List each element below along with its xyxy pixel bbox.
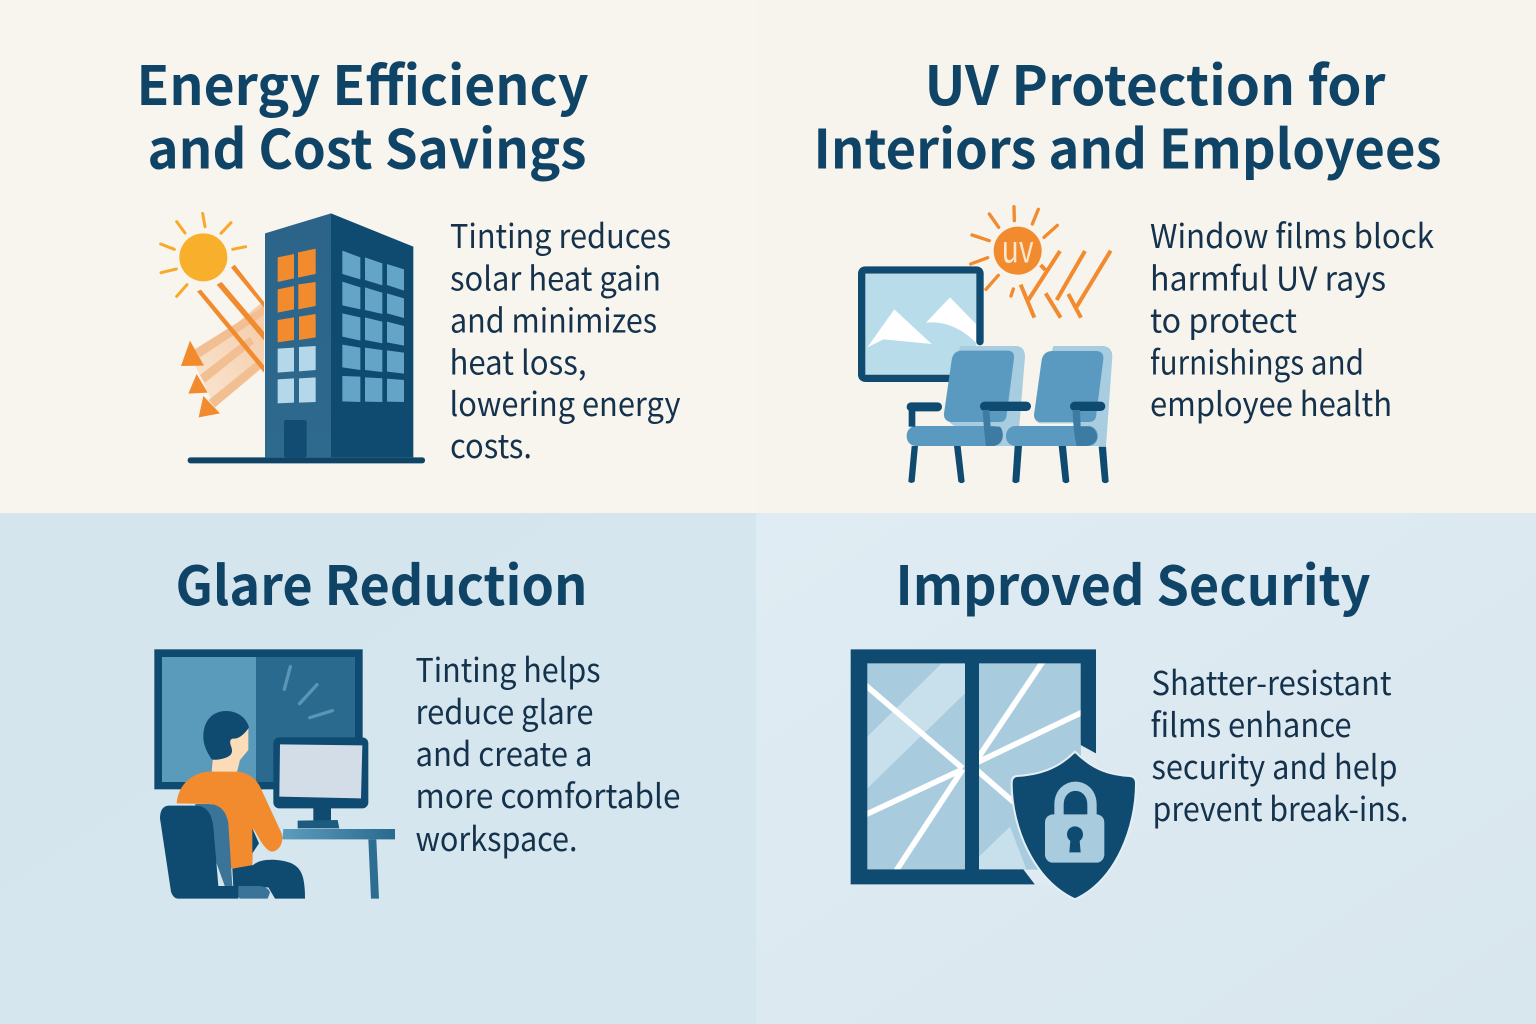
icon: sun rays xyxy=(197,265,264,373)
icon: cracked window and shield xyxy=(851,649,1136,899)
text: energy efficiency description: and minimizes xyxy=(450,294,657,342)
icon: uv sun xyxy=(971,207,1057,296)
text: glare reduction description: Tinting helps xyxy=(416,644,600,692)
icon: office chair xyxy=(160,804,270,899)
heading: uv protection xyxy=(814,42,1442,184)
heading: energy efficiency xyxy=(136,42,588,184)
text: energy efficiency description: lowering energy xyxy=(450,378,680,426)
text: glare reduction description: more comfortable xyxy=(416,770,680,818)
icon: person xyxy=(177,711,305,899)
heading: energy efficiency: and Cost Savings xyxy=(148,106,586,184)
heading: improved security: Improved Security xyxy=(896,542,1370,621)
text: glare reduction description: and create a xyxy=(416,728,592,776)
text: improved security description: prevent break-ins. xyxy=(1152,783,1408,831)
text: uv protection description: harmful UV rays xyxy=(1150,252,1386,300)
text: uv protection description: Window films block xyxy=(1150,210,1434,258)
text: improved security description: films enhance xyxy=(1150,699,1352,747)
icon: tinted window xyxy=(154,649,363,789)
icon: sun and building xyxy=(161,213,425,463)
text: energy efficiency description: Tinting reduces xyxy=(450,210,671,258)
text: uv protection description: to protect xyxy=(1150,294,1297,342)
panel: uv protection xyxy=(756,0,1536,513)
text: energy efficiency description xyxy=(450,210,680,468)
icon: cracked window xyxy=(851,649,1098,885)
icon: uv sun, picture window and chairs xyxy=(862,207,1112,483)
text: energy efficiency description: costs. xyxy=(450,420,532,468)
icon: framed window view xyxy=(862,270,980,378)
icon: building xyxy=(188,213,425,463)
text: glare reduction description: reduce glare xyxy=(416,686,594,734)
text: uv protection description: furnishings and xyxy=(1150,336,1364,384)
icon: security shield with lock xyxy=(1012,752,1136,899)
icon: sun xyxy=(161,213,246,296)
text: improved security description: Shatter-resistant xyxy=(1152,657,1392,705)
heading: energy efficiency: Energy Efficiency xyxy=(136,42,588,121)
text: uv protection description: employee health xyxy=(1150,378,1392,426)
icon: left chair xyxy=(907,346,1031,483)
panel: improved security xyxy=(756,513,1536,1024)
text: improved security description: security and help xyxy=(1152,741,1398,789)
text: uv protection description xyxy=(1150,210,1434,426)
icon: person at computer by window xyxy=(154,649,395,899)
icon: reflected heat bands xyxy=(181,301,264,417)
icon: right chair xyxy=(1006,346,1112,483)
panel: glare reduction xyxy=(0,513,756,1024)
text: glare reduction description xyxy=(416,644,680,861)
icon: uv sun: uv xyxy=(1002,220,1034,274)
heading: uv protection: Interiors and Employees xyxy=(814,106,1442,184)
icon: computer monitor xyxy=(273,737,368,828)
text: energy efficiency description: solar heat gain xyxy=(450,252,661,300)
heading: uv protection: UV Protection for xyxy=(924,42,1386,121)
icon: uv rays xyxy=(1021,251,1111,318)
text: improved security description xyxy=(1150,657,1408,831)
heading: glare reduction: Glare Reduction xyxy=(176,542,588,621)
text: energy efficiency description: heat loss, xyxy=(450,336,586,384)
panel: energy efficiency xyxy=(0,0,756,513)
text: glare reduction description: workspace. xyxy=(416,813,578,861)
icon: desk xyxy=(282,829,395,899)
